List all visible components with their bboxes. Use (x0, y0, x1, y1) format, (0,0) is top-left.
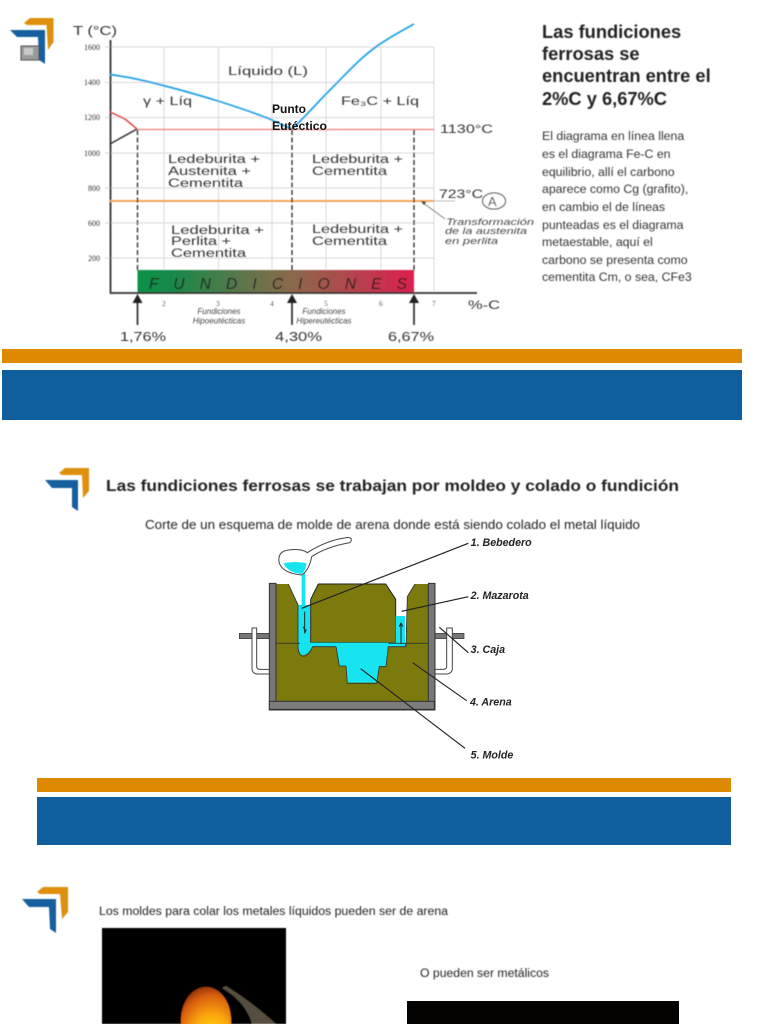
phase region labels: Cementita (312, 166, 388, 178)
y axis labels: 1000 (84, 149, 100, 158)
caption: moldes metalicos: O pueden ser metálicos (420, 968, 549, 980)
x axis labels: 4 (270, 299, 274, 308)
diagram: sand mold cross-section (239, 537, 532, 762)
composition values: 6,67% (388, 330, 434, 344)
mold outline (270, 584, 428, 683)
phase region labels: Austenita + (168, 166, 251, 178)
ladle (279, 537, 351, 575)
text block: explanation: punteadas es el diagrama (542, 218, 684, 232)
annotation: transformacion: de la austenita (445, 226, 527, 236)
temperature labels: 723°C (439, 189, 483, 201)
y axis labels: 600 (88, 219, 100, 228)
composition arrows (132, 294, 419, 325)
y axis labels: 1400 (84, 78, 100, 87)
part labels: 4. Arena (469, 696, 512, 708)
phase region labels: Cementita (168, 178, 244, 190)
flask walls (269, 583, 435, 710)
part labels: 3. Caja (471, 644, 505, 656)
axes (110, 40, 477, 293)
text block: explanation: cementita Cm, o sea, CFe3 (542, 270, 692, 284)
callout: punto eutectico: Punto (272, 102, 306, 116)
temperature labels (439, 124, 506, 209)
composition values: 1,76% (120, 330, 166, 344)
y axis labels: 800 (88, 184, 100, 193)
x axis labels (162, 299, 436, 308)
upper sand core (311, 584, 396, 643)
x axis labels: 3 (216, 299, 220, 308)
logo: middle (45, 468, 89, 511)
part labels: 1. Bebedero (471, 537, 532, 549)
sub-labels: hypo and hyper: Fundiciones (197, 307, 241, 316)
logo: top with computer icon (10, 18, 54, 64)
base plate (269, 701, 434, 709)
flow arrows (303, 612, 403, 644)
phase region labels: Cementita (312, 236, 388, 248)
phase region labels: Fe₃C + Líq (341, 96, 419, 108)
composition values (120, 330, 434, 344)
sub-labels: hypo and hyper (193, 307, 352, 326)
liquidus curve (110, 24, 414, 129)
x axis title: %-C (468, 298, 500, 312)
text block: explanation: equilibrio, allí el carbono (542, 165, 675, 179)
heading: fundiciones ferrosas: ferrosas se (542, 43, 640, 64)
phase region labels: Ledeburita + (312, 154, 403, 166)
text block: explanation: aparece como Cg (grafito), (542, 182, 688, 196)
x axis labels: 2 (162, 299, 166, 308)
sub-labels: hypo and hyper: Fundiciones (302, 307, 346, 316)
text block: explanation: es el diagrama Fe-C en (542, 147, 671, 161)
solidus curves (110, 112, 434, 201)
heading: fundiciones ferrosas: encuentran entre el (542, 65, 711, 86)
sub-labels: hypo and hyper: Hipereutécticas (296, 316, 352, 326)
side bars and clamps (239, 628, 464, 674)
phase region labels: Ledeburita + (168, 154, 260, 166)
part labels: 2. Mazarota (470, 590, 529, 602)
y axis labels: 200 (88, 254, 100, 263)
part labels (469, 537, 532, 762)
y axis labels (84, 43, 100, 263)
composition bar: fundiciones: F U N D I C I O N E S (149, 276, 408, 293)
text block: explanation: El diagrama en línea llena (542, 129, 684, 143)
heading: fundiciones ferrosas: Las fundiciones (542, 21, 681, 42)
dashed composition lines (138, 130, 414, 270)
phase region labels (143, 66, 419, 260)
text block: explanation: en cambio el de líneas (542, 200, 665, 214)
phase region labels: Ledeburita + (312, 224, 403, 236)
leader lines (302, 543, 468, 748)
annotation: transformacion (421, 201, 534, 246)
heading: fundiciones ferrosas: 2%C y 6,67%C (542, 88, 667, 109)
callout: punto eutectico: Eutéctico (272, 119, 327, 133)
temperature labels: A (488, 194, 497, 209)
composition values: 4,30% (275, 330, 322, 344)
sand (275, 584, 428, 702)
text block: explanation: carbono se presenta como (542, 253, 688, 267)
annotation: transformacion: en perlita (445, 236, 498, 246)
chart: iron-carbon phase diagram (73, 24, 534, 344)
subtitle: corte de molde: Corte de un esquema de molde de arena donde está siendo colado el metal líquido (145, 517, 640, 532)
y axis labels: 1200 (84, 113, 100, 122)
sub-labels: hypo and hyper: Hipoeutécticas (193, 316, 245, 326)
phase region labels: Líquido (L) (228, 66, 308, 78)
part labels: 5. Molde (471, 750, 513, 762)
footer band one (2, 349, 742, 420)
x axis labels: 5 (324, 299, 328, 308)
annotation: transformacion: Transformación (446, 217, 534, 227)
composition bar: fundiciones (138, 270, 414, 293)
phase region labels: Ledeburita + (171, 225, 264, 237)
photo: sand casting ladle (102, 928, 286, 1024)
phase region labels: Perlita + (171, 236, 231, 248)
phase region labels: Cementita (171, 248, 247, 260)
molten metal (298, 572, 405, 683)
temperature labels: 1130°C (440, 124, 493, 136)
footer band two (37, 778, 731, 845)
logo: bottom (22, 887, 68, 933)
y axis labels: 1600 (84, 43, 100, 52)
x axis labels: 6 (379, 299, 383, 308)
text block: explanation: metaestable, aquí el (542, 235, 653, 249)
photo: metal mold (407, 1001, 679, 1024)
chart grid (105, 47, 455, 293)
phase region labels: γ + Líq (143, 96, 192, 108)
caption: moldes de arena: Los moldes para colar los metales líquidos pueden ser de arena (99, 906, 449, 918)
x axis labels: 7 (432, 299, 436, 308)
axis title temperature: T (°C) (73, 24, 117, 38)
heading: moldeo y colado: Las fundiciones ferrosas se trabajan por moldeo y colado o fundición (106, 478, 679, 495)
